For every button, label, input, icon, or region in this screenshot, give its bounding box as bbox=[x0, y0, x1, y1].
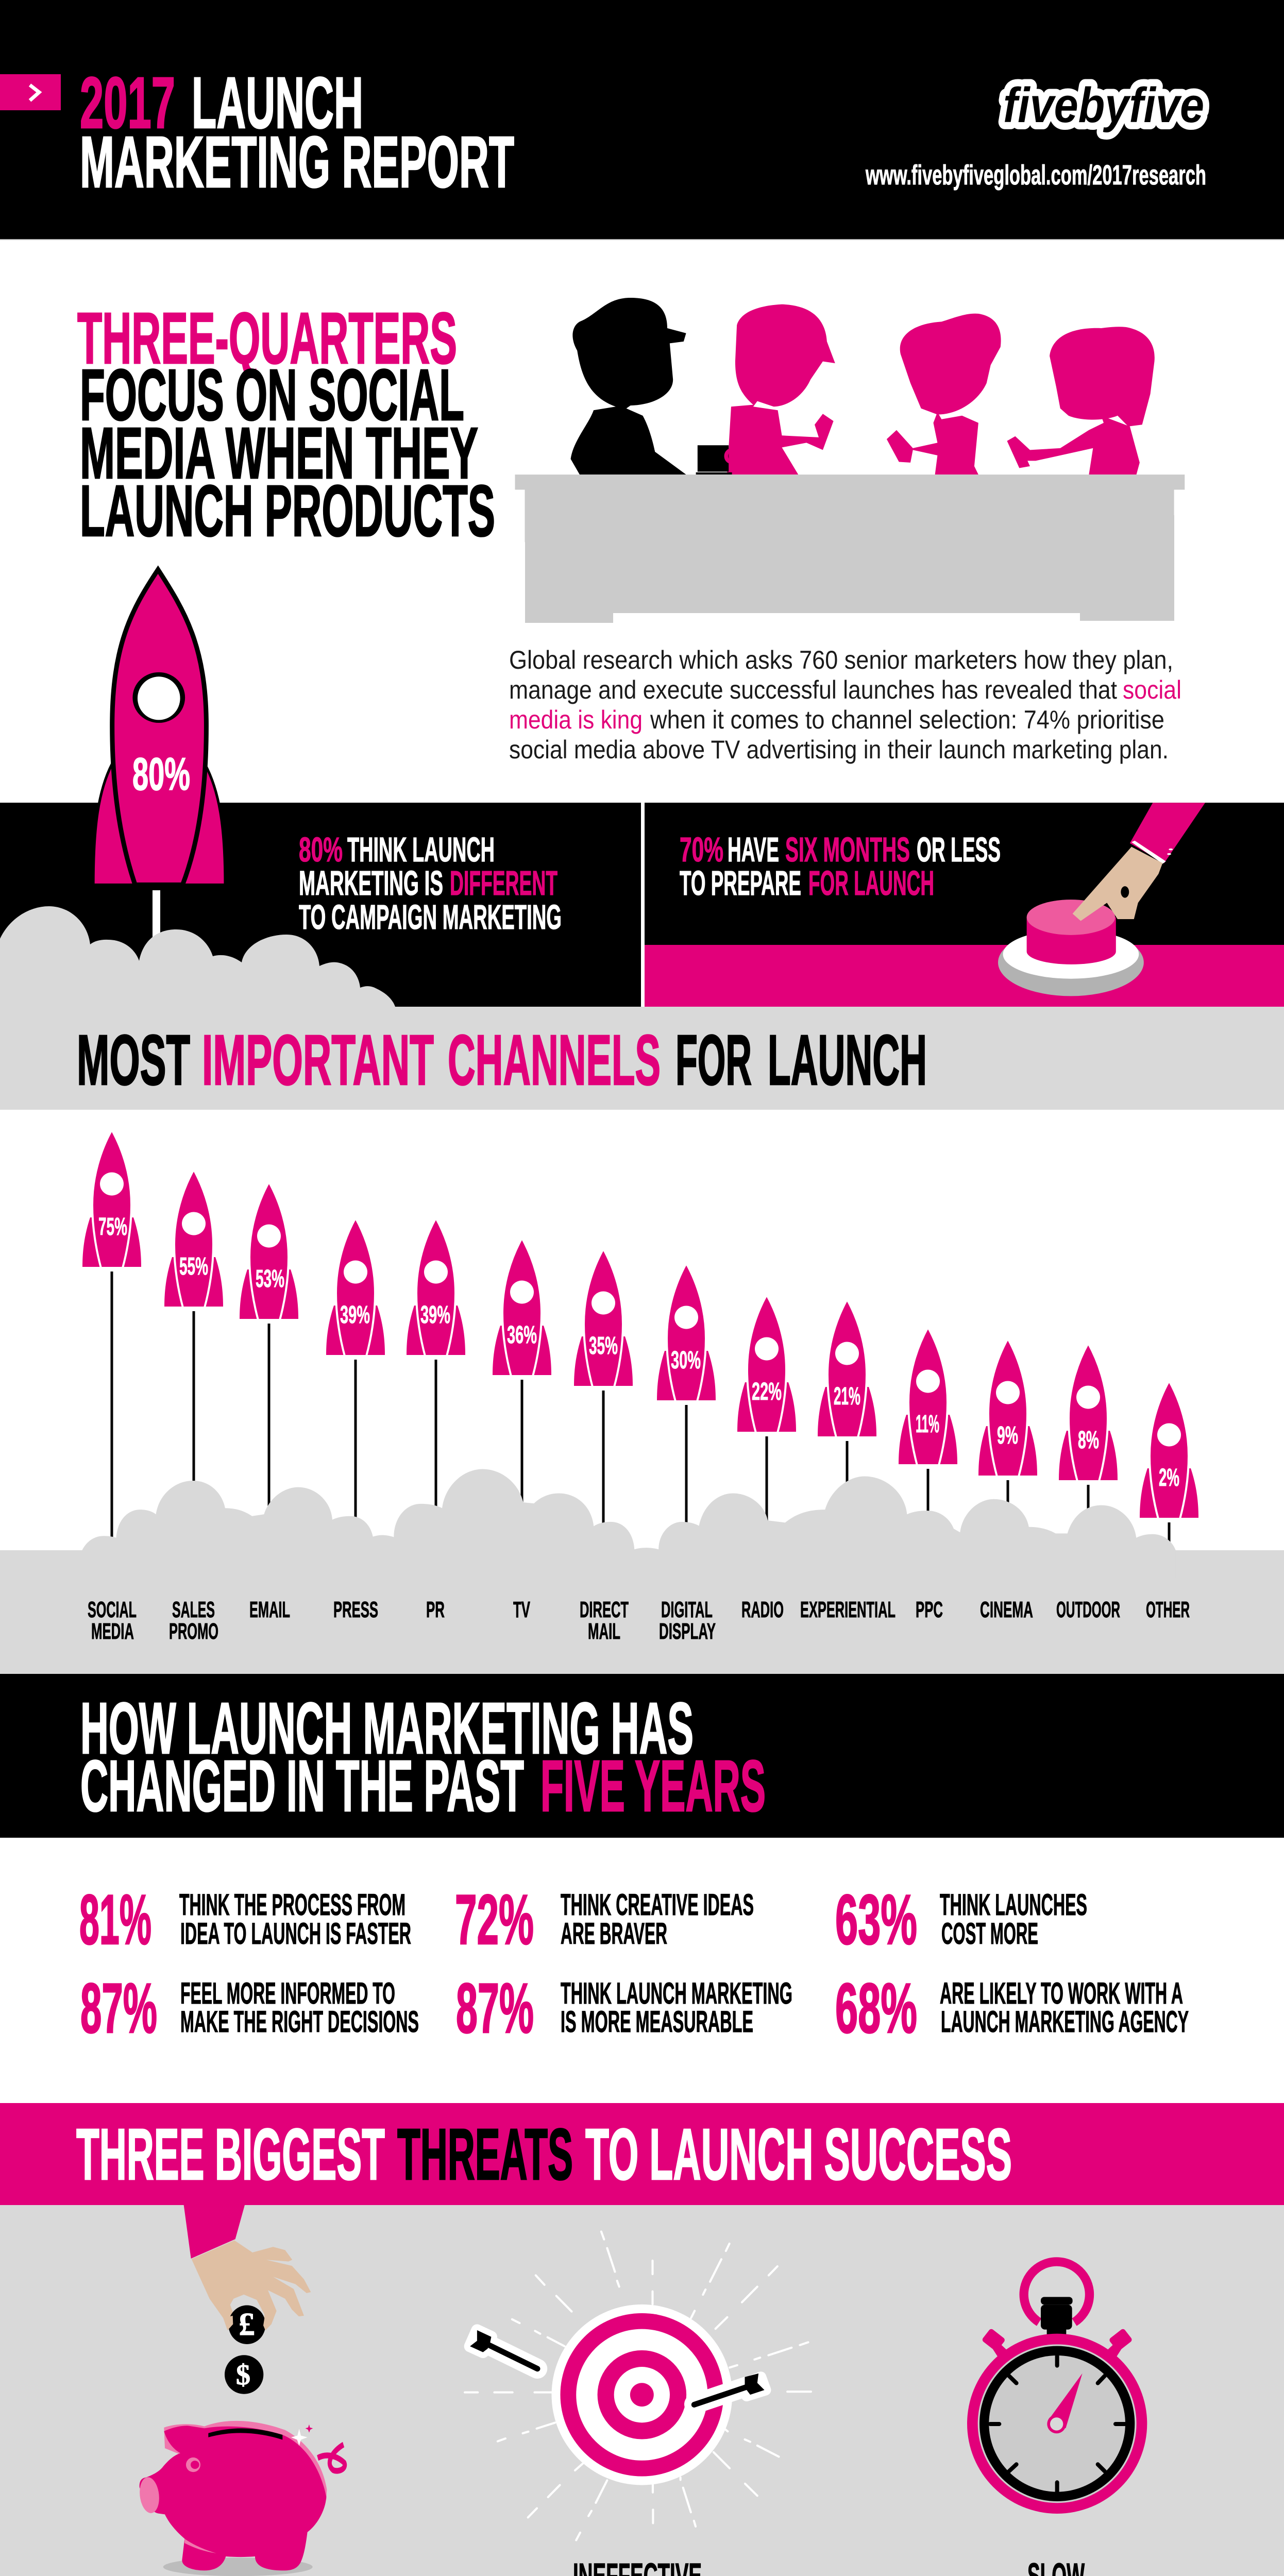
heading bbox=[80, 1687, 766, 1826]
body paragraph: social bbox=[1123, 675, 1181, 704]
rocket: radio 22% bbox=[737, 1295, 796, 1591]
heading: THREATS bbox=[397, 2113, 573, 2195]
rocket: direct mail 35%: 35% bbox=[589, 1332, 618, 1360]
channel labels: PR bbox=[426, 1597, 445, 1622]
rocket: press 39% bbox=[326, 1218, 385, 1566]
panel: 80% stat bbox=[0, 803, 641, 1007]
stat: 63%: THINK LAUNCHES bbox=[940, 1888, 1087, 1922]
desk base bbox=[525, 515, 1174, 623]
stat text: 80% think launch marketing is different: 80% bbox=[299, 831, 343, 869]
rocket: email 53% bbox=[240, 1182, 298, 1581]
illustration: people at desk with phones bbox=[515, 298, 1185, 542]
icon: stopwatch bbox=[967, 2262, 1147, 2514]
stat: 72% bbox=[455, 1880, 754, 1959]
section band: three biggest threats bbox=[0, 2103, 1284, 2205]
stat text: 80% think launch marketing is different: MARKETING IS bbox=[299, 864, 443, 903]
stat: 81%: THINK THE PROCESS FROM bbox=[179, 1888, 406, 1922]
icon: hand dropping coins: £ bbox=[239, 2307, 255, 2342]
heading bbox=[76, 2113, 1012, 2195]
heading: THREE BIGGEST bbox=[76, 2113, 385, 2195]
heading: HOW LAUNCH MARKETING HAS bbox=[80, 1687, 694, 1769]
title: LAUNCH bbox=[192, 62, 363, 143]
stat: 63% bbox=[835, 1880, 1087, 1959]
stat: 87% informed: MAKE THE RIGHT DECISIONS bbox=[180, 2005, 419, 2039]
title bbox=[80, 62, 514, 202]
stat: 87% informed: FEEL MORE INFORMED TO bbox=[180, 1977, 395, 2010]
icon: hand dropping coins bbox=[184, 2205, 311, 2394]
rocket: cinema 9%: 9% bbox=[997, 1422, 1018, 1449]
body paragraph: manage and execute successful launches has revealed that bbox=[509, 675, 1117, 704]
channel labels: OTHER bbox=[1146, 1597, 1190, 1622]
rocket: other 2% bbox=[1140, 1381, 1198, 1584]
stat text: 80% think launch marketing is different: DIFFERENT bbox=[450, 864, 557, 903]
stat: 81% bbox=[79, 1880, 411, 1959]
rocket: tv 36% bbox=[493, 1238, 551, 1586]
channel labels: OUTDOOR bbox=[1056, 1597, 1120, 1622]
header band bbox=[0, 0, 1284, 240]
heading: CHANNELS bbox=[448, 1021, 661, 1100]
rocket: ppc 11%: 11% bbox=[916, 1411, 939, 1438]
stat: 72%: 72% bbox=[455, 1880, 534, 1959]
stat: 87% informed bbox=[80, 1969, 419, 2048]
stat: 68% bbox=[835, 1969, 1189, 2048]
rocket: social media 75%: 75% bbox=[98, 1213, 127, 1241]
rocket: email 53%: 53% bbox=[256, 1265, 284, 1293]
stat: 63%: 63% bbox=[835, 1880, 917, 1959]
channel labels: EXPERIENTIAL bbox=[800, 1597, 896, 1622]
stat text: six months or less: SIX MONTHS bbox=[785, 831, 910, 869]
headline: three-quarters: LAUNCH PRODUCTS bbox=[80, 470, 495, 551]
rocket: ppc 11% bbox=[899, 1327, 957, 1598]
stat text: six months or less: OR LESS bbox=[917, 831, 1001, 869]
arrow: left, missed bbox=[470, 2330, 537, 2369]
channel labels: PROMO bbox=[169, 1619, 218, 1644]
icon: large rocket 80% bbox=[93, 570, 225, 947]
rocket: pr 39%: 39% bbox=[420, 1301, 450, 1329]
section band: most important channels bbox=[0, 1007, 1284, 1110]
stat text: six months or less: FOR LAUNCH bbox=[808, 864, 934, 903]
title: 2017 bbox=[80, 62, 175, 143]
stat: 72%: THINK CREATIVE IDEAS bbox=[561, 1888, 754, 1922]
stat text: six months or less: 70% bbox=[680, 831, 723, 869]
stat text: six months or less: TO PREPARE bbox=[680, 864, 801, 903]
channel labels: MAIL bbox=[588, 1619, 620, 1644]
logo: fivebyfive: fivebyfive bbox=[1003, 78, 1204, 133]
channel labels bbox=[88, 1597, 1190, 1644]
rocket: digital display 30%: 30% bbox=[671, 1347, 701, 1374]
heading: FOR bbox=[675, 1021, 752, 1100]
body paragraph: when it comes to channel selection: 74% prioritise bbox=[650, 705, 1164, 734]
channel labels: TV bbox=[513, 1597, 530, 1622]
channel labels: CINEMA bbox=[980, 1597, 1033, 1622]
chart: channel rockets bbox=[82, 1130, 1198, 1598]
channel labels: RADIO bbox=[741, 1597, 784, 1622]
stat: 87% measurable bbox=[456, 1969, 792, 2048]
body paragraph: social media above TV advertising in their launch marketing plan. bbox=[509, 735, 1169, 764]
stat: 87% informed: 87% bbox=[80, 1969, 157, 2048]
stat: 87% measurable: 87% bbox=[456, 1969, 534, 2048]
rocket: direct mail 35% bbox=[574, 1249, 633, 1597]
body paragraph bbox=[509, 646, 1181, 764]
cloud ground bbox=[0, 1469, 1284, 1674]
rocket: outdoor 8% bbox=[1059, 1343, 1118, 1588]
stat text: six months or less bbox=[680, 831, 1001, 903]
channel labels: SOCIAL bbox=[88, 1597, 137, 1622]
icon: launch button with pointing hand bbox=[998, 803, 1205, 996]
headline: three-quarters: FOCUS ON SOCIAL bbox=[80, 354, 464, 435]
divider white bbox=[641, 803, 645, 1007]
rocket: other 2%: 2% bbox=[1159, 1464, 1179, 1492]
channel labels: DIGITAL bbox=[661, 1597, 713, 1622]
arrow: right, in target bbox=[694, 2374, 766, 2404]
panel: threats bbox=[0, 2205, 1284, 2576]
section: how launch marketing has changed bbox=[0, 1674, 1284, 1838]
channel labels: EMAIL bbox=[249, 1597, 290, 1622]
stat text: 80% think launch marketing is different: THINK LAUNCH bbox=[347, 831, 495, 869]
headline: three-quarters: MEDIA WHEN THEY bbox=[80, 412, 478, 494]
rocket: pr 39% bbox=[407, 1218, 465, 1566]
stat text: 80% think launch marketing is different: TO CAMPAIGN MARKETING bbox=[299, 898, 562, 937]
channel labels: DIRECT bbox=[580, 1597, 629, 1622]
heading: IMPORTANT bbox=[202, 1021, 434, 1100]
rocket: social media 75% bbox=[82, 1130, 141, 1560]
icon: hand dropping coins: $ bbox=[236, 2359, 250, 2391]
headline: three-quarters bbox=[77, 297, 495, 551]
heading: FIVE YEARS bbox=[540, 1745, 766, 1826]
stat: 68%: 68% bbox=[835, 1969, 917, 2048]
rocket: sales promo 55%: 55% bbox=[179, 1253, 208, 1280]
rocket: tv 36%: 36% bbox=[507, 1321, 537, 1349]
channel labels: MEDIA bbox=[91, 1619, 134, 1644]
rocket: digital display 30% bbox=[657, 1263, 716, 1585]
title: MARKETING REPORT bbox=[80, 121, 514, 202]
heading: MOST bbox=[77, 1021, 190, 1100]
headline: three-quarters: THREE-QUARTERS bbox=[77, 297, 457, 379]
body paragraph: media is king bbox=[509, 705, 643, 734]
panel: 70% stat bbox=[645, 803, 1284, 1007]
rocket: experiential 21%: 21% bbox=[834, 1383, 860, 1410]
icon: target with arrows bbox=[465, 2231, 811, 2540]
icon: large rocket 80%: 80% bbox=[132, 748, 190, 800]
icon: pink tab with chevron bbox=[0, 74, 61, 110]
channel labels: PRESS bbox=[333, 1597, 378, 1622]
body paragraph: Global research which asks 760 senior marketers how they plan, bbox=[509, 646, 1173, 674]
rocket: radio 22%: 22% bbox=[752, 1378, 782, 1405]
rocket: cinema 9% bbox=[978, 1338, 1037, 1583]
rocket: experiential 21% bbox=[818, 1299, 876, 1596]
icon: piggy bank bbox=[137, 2421, 345, 2576]
heading: CHANGED IN THE PAST bbox=[80, 1745, 524, 1826]
channel labels: DISPLAY bbox=[659, 1619, 716, 1644]
stats grid bbox=[79, 1880, 1189, 2048]
rocket: sales promo 55% bbox=[164, 1170, 223, 1569]
rocket: outdoor 8%: 8% bbox=[1078, 1427, 1099, 1454]
rocket: press 39%: 39% bbox=[340, 1301, 370, 1329]
heading: LAUNCH bbox=[768, 1021, 927, 1100]
cloud: rocket exhaust bbox=[0, 906, 395, 1010]
stat text: six months or less: HAVE bbox=[728, 831, 779, 869]
channel labels: SALES bbox=[172, 1597, 215, 1622]
stat: 87% measurable: THINK LAUNCH MARKETING bbox=[561, 1977, 792, 2010]
stat: 87% measurable: IS MORE MEASURABLE bbox=[561, 2005, 753, 2039]
stat: 81%: IDEA TO LAUNCH IS FASTER bbox=[180, 1917, 411, 1951]
stat: 63%: COST MORE bbox=[941, 1917, 1038, 1951]
heading bbox=[77, 1021, 927, 1100]
stat: 72%: ARE BRAVER bbox=[561, 1917, 667, 1951]
stat text: 80% think launch marketing is different bbox=[299, 831, 562, 937]
stat: 81%: 81% bbox=[79, 1880, 151, 1959]
channel labels: PPC bbox=[916, 1597, 943, 1622]
